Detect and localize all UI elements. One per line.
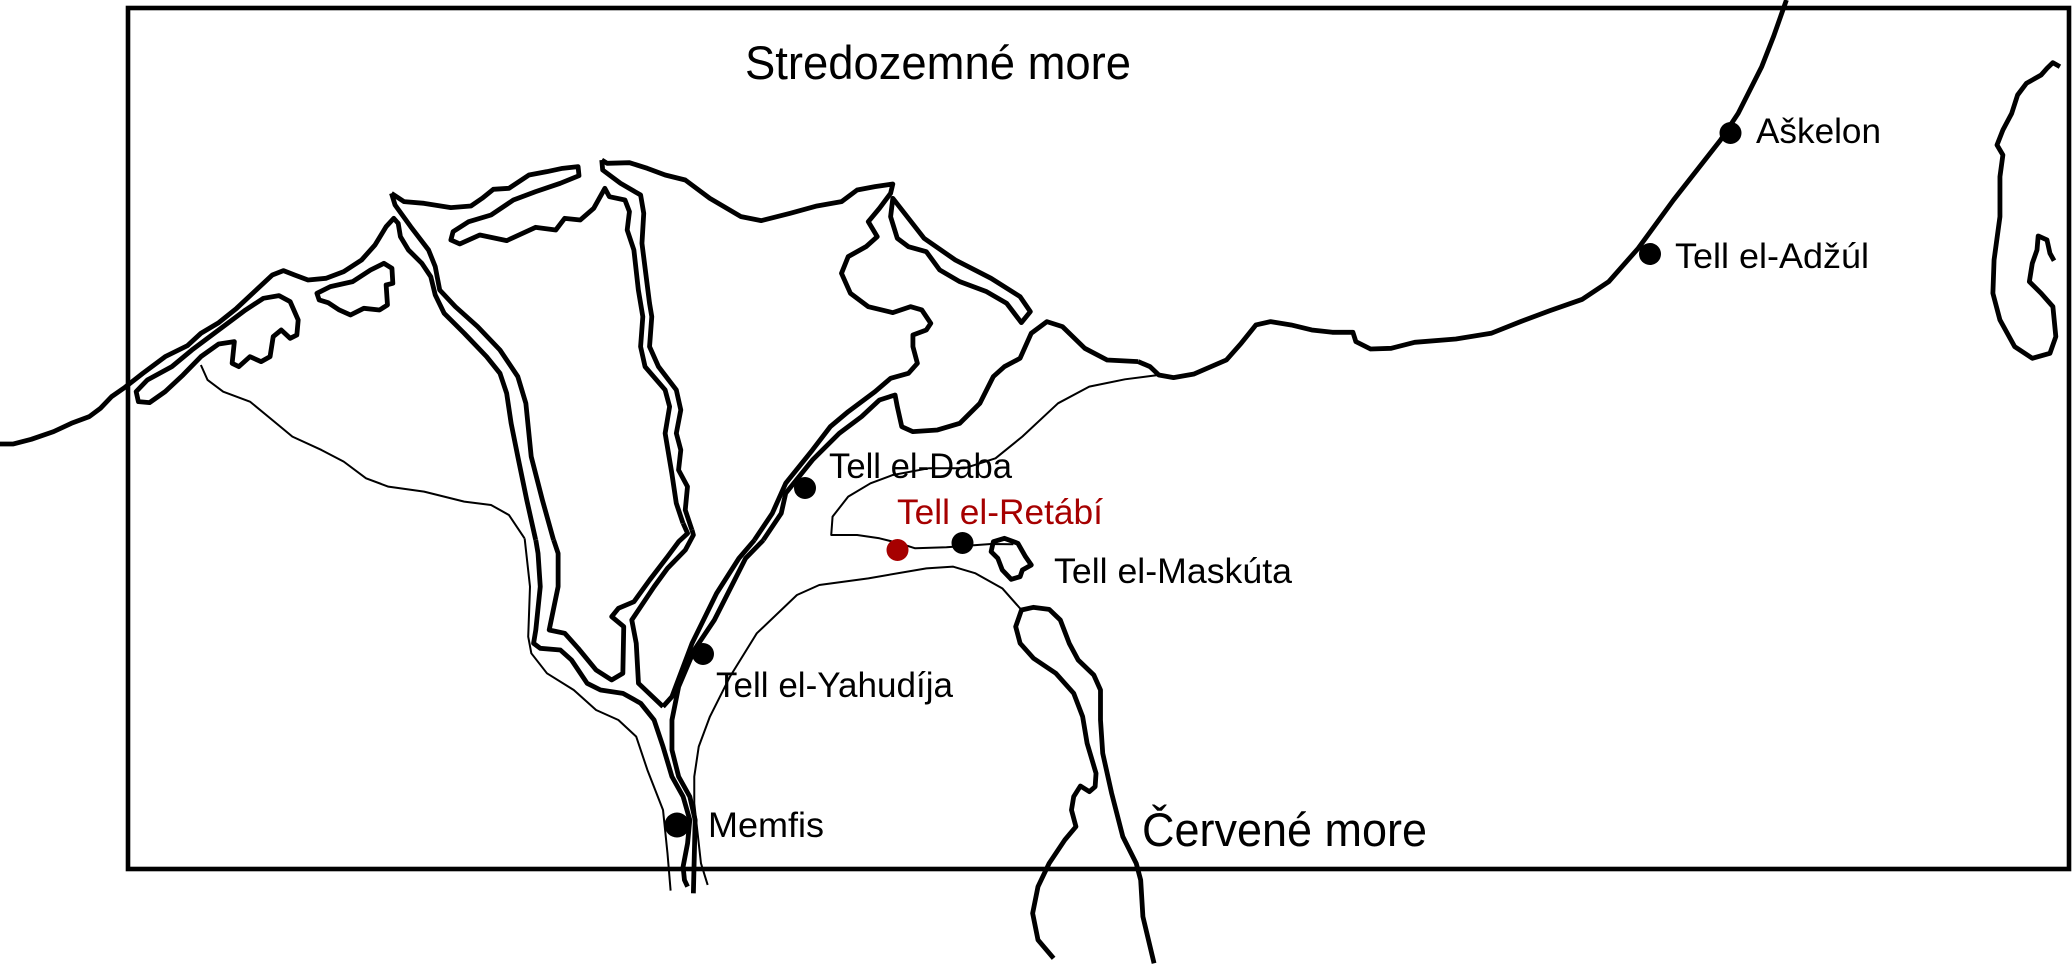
lake near Tell el-Maskuta xyxy=(991,538,1031,579)
site: Memfis: Memfis xyxy=(708,806,824,845)
lagoon west xyxy=(136,296,298,403)
sea label: Red Sea: Červené more xyxy=(1142,803,1427,856)
site: Tell el-Adžúl: Tell el-Adžúl xyxy=(1675,237,1869,276)
Dead Sea and Jordan outline xyxy=(1993,63,2060,358)
site: Tell el-Yahudíja: Tell el-Yahudíja xyxy=(716,666,954,705)
Red Sea gulf outline xyxy=(1016,607,1154,963)
site: Tell el-Retábí (highlighted): Tell el-Retábí xyxy=(897,493,1103,532)
Sinai coast to Ashkelon xyxy=(1138,0,1786,378)
delta coast and east branch west bank xyxy=(602,160,931,707)
site: Tell el-Retábí (highlighted) xyxy=(886,493,1103,561)
canal from coast to Maskuta xyxy=(831,375,1158,548)
sea label: Mediterranean: Stredozemné more xyxy=(745,36,1131,89)
eastern coast and east Nile branch down to Memphis xyxy=(672,322,1138,893)
western thin channel xyxy=(201,365,671,891)
site: Aškelon: Aškelon xyxy=(1756,112,1881,151)
eastern thin channel xyxy=(694,567,1021,885)
west branch outer bank curling into the central branch xyxy=(391,193,688,680)
north coast with lagoon and central branch west bank xyxy=(391,167,683,523)
western coastline and west branch inner bank xyxy=(0,218,690,887)
site: Tell el-Daba: Tell el-Daba xyxy=(829,447,1013,486)
lagoon small xyxy=(317,263,393,315)
site: Tell el-Maskúta xyxy=(952,532,1293,591)
central branch east bank xyxy=(602,160,693,707)
site: Tell el-Yahudíja xyxy=(692,643,954,705)
site: Tell el-Daba xyxy=(794,447,1013,499)
lagoon east xyxy=(891,198,1030,323)
site: Tell el-Maskúta: Tell el-Maskúta xyxy=(1054,552,1293,591)
